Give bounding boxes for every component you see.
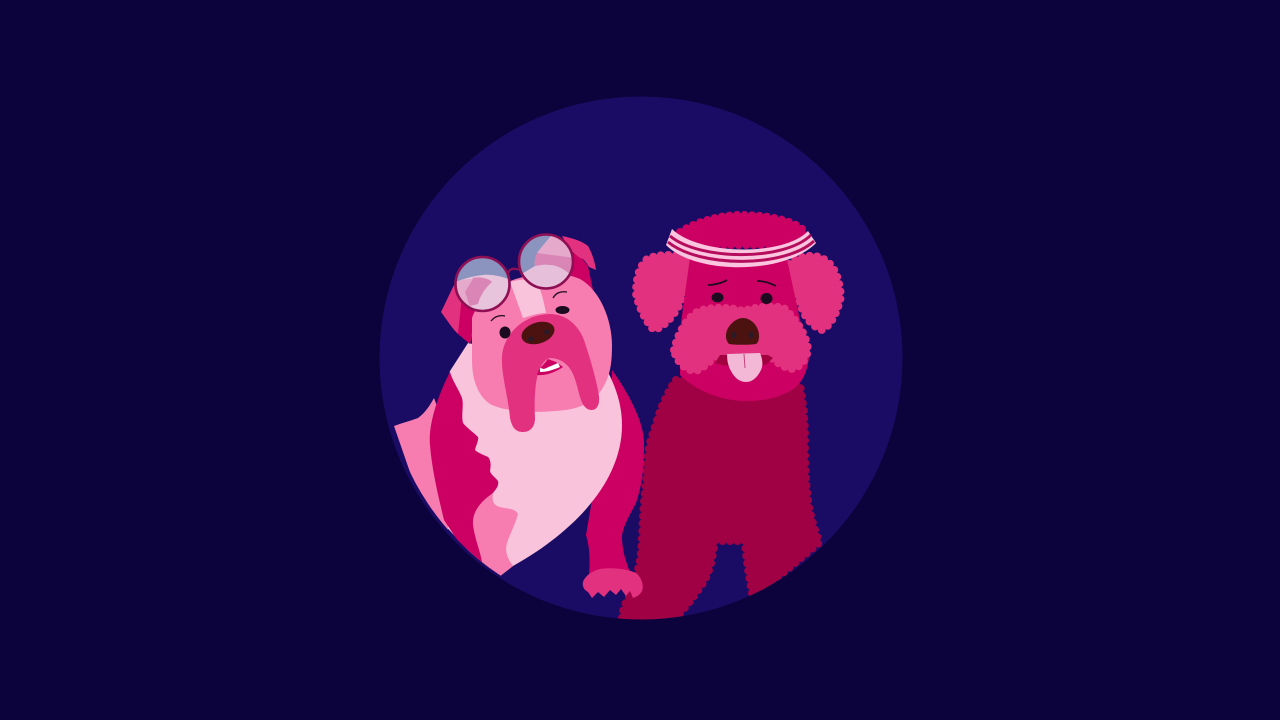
poodle headband bbox=[666, 229, 816, 267]
bulldog eyes and brows bbox=[491, 292, 570, 338]
poodle body bbox=[620, 380, 819, 630]
poodle left ear bbox=[636, 255, 690, 330]
bulldog jowls bbox=[502, 314, 599, 432]
poodle nose bbox=[726, 318, 759, 345]
forehead stripe bbox=[510, 279, 546, 318]
poodle eyes and brows bbox=[708, 280, 776, 304]
bulldog paw bbox=[583, 568, 643, 598]
poodle tongue bbox=[727, 353, 762, 382]
bulldog left ear bbox=[441, 285, 478, 344]
bulldog body bbox=[394, 343, 622, 590]
bulldog right ear bbox=[562, 236, 596, 290]
bulldog nose bbox=[519, 318, 557, 348]
poodle mouth bbox=[715, 355, 773, 367]
bulldog front leg bbox=[586, 370, 644, 575]
bulldog mouth bbox=[537, 359, 563, 375]
bulldog head bbox=[472, 273, 612, 412]
poodle top hair bbox=[678, 215, 805, 245]
illustration: two dogs in a circle bbox=[380, 96, 902, 620]
dog: bulldog bbox=[394, 230, 644, 598]
poodle right ear bbox=[789, 256, 841, 330]
poodle muzzle bbox=[674, 307, 808, 371]
poodle head bbox=[680, 250, 810, 401]
bulldog glasses bbox=[454, 233, 574, 312]
background circle bbox=[380, 96, 902, 620]
dog: poodle bbox=[620, 215, 841, 630]
